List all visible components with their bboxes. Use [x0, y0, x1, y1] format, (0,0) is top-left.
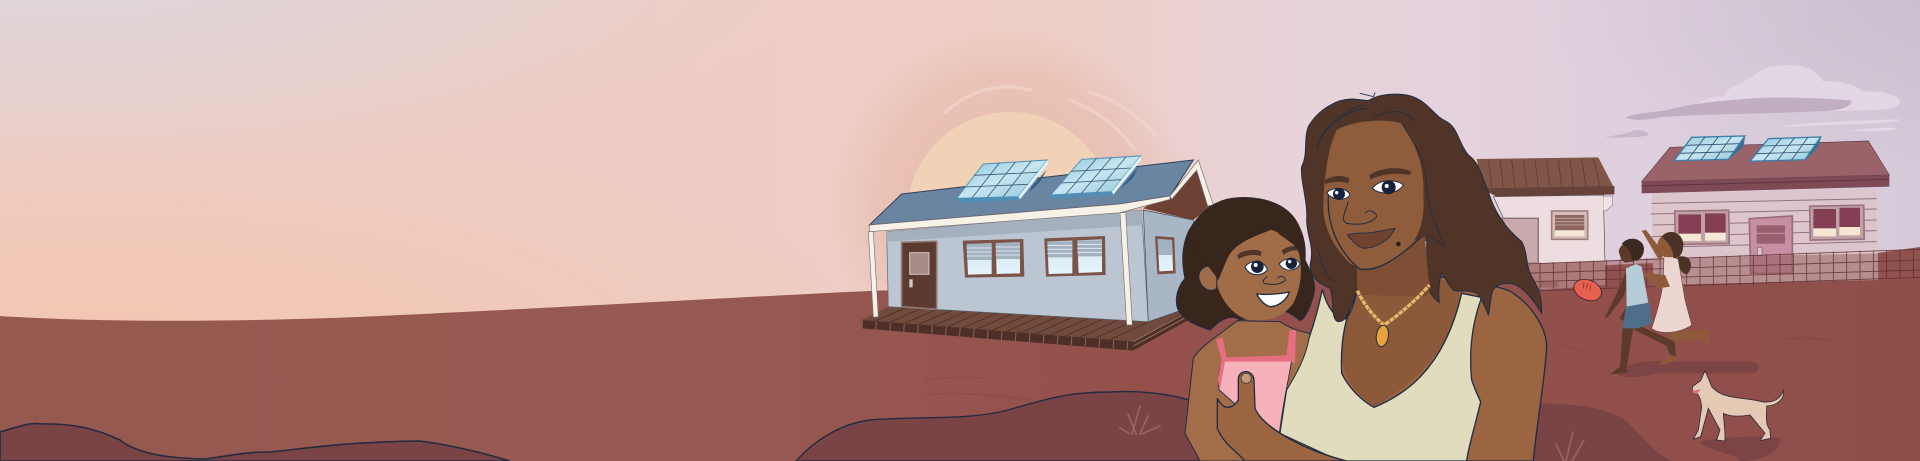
mother: hand and thumb	[1217, 372, 1347, 461]
sun	[907, 112, 1113, 318]
grass tufts	[1120, 406, 1584, 461]
mother: neck	[1357, 237, 1431, 297]
clouds	[1604, 65, 1900, 138]
window: side wall	[1155, 236, 1176, 274]
main house with solar panels	[862, 156, 1213, 351]
fence	[1525, 247, 1920, 291]
dog	[1692, 371, 1784, 461]
child: smile	[1257, 292, 1289, 307]
child: hair fringe	[1188, 198, 1303, 280]
gable	[1143, 170, 1213, 220]
mother: front hair strands	[1317, 93, 1445, 282]
mother: jaw line	[1328, 195, 1422, 270]
child: body	[1185, 321, 1340, 461]
mother: necklace	[1357, 285, 1429, 347]
window: front left	[963, 239, 1024, 278]
mother: eyes	[1327, 180, 1403, 200]
solar panel 2	[1051, 156, 1141, 199]
football	[1571, 275, 1605, 305]
child: back hair	[1176, 198, 1315, 330]
mother: thumb nail	[1241, 373, 1251, 383]
mother: chest	[1341, 280, 1462, 407]
mother: white singlet	[1278, 289, 1482, 461]
child: nose	[1263, 276, 1285, 284]
mother and child	[1176, 93, 1547, 461]
door	[902, 241, 937, 309]
mother: hair	[1301, 94, 1542, 322]
window: front right	[1044, 236, 1106, 277]
child: face	[1217, 228, 1301, 320]
house: pink with maroon roof	[1642, 141, 1889, 285]
ground	[0, 247, 1920, 461]
solar panels: right house	[1674, 136, 1821, 161]
child: eyebrows	[1237, 246, 1298, 259]
mother: body	[1337, 277, 1547, 461]
mother: mouth	[1347, 228, 1395, 248]
solar panel 1	[957, 160, 1048, 203]
foreground hill: middle	[796, 392, 1220, 461]
child: eyes	[1245, 258, 1300, 275]
foreground hill: right	[1500, 403, 1672, 461]
girl running	[1642, 230, 1709, 366]
boy running	[1604, 239, 1676, 374]
children shadow	[1617, 361, 1759, 377]
fascia and posts	[868, 160, 1213, 325]
house walls	[887, 210, 1193, 322]
sun rays	[945, 87, 1155, 150]
right scene	[1477, 65, 1920, 461]
child: ear	[1199, 266, 1217, 290]
roof	[869, 160, 1193, 225]
mother: eyebrows	[1325, 168, 1412, 184]
sun halo	[830, 25, 1190, 385]
ground shade lines	[925, 338, 1830, 400]
mother: mole	[1396, 242, 1401, 246]
mother: nose	[1343, 202, 1377, 224]
foreground hill: left	[0, 423, 510, 461]
mother: face	[1323, 121, 1424, 268]
sky background	[0, 0, 1920, 330]
child: pink top	[1216, 330, 1296, 433]
house: white with brown roof	[1477, 157, 1614, 290]
deck	[862, 307, 1188, 351]
